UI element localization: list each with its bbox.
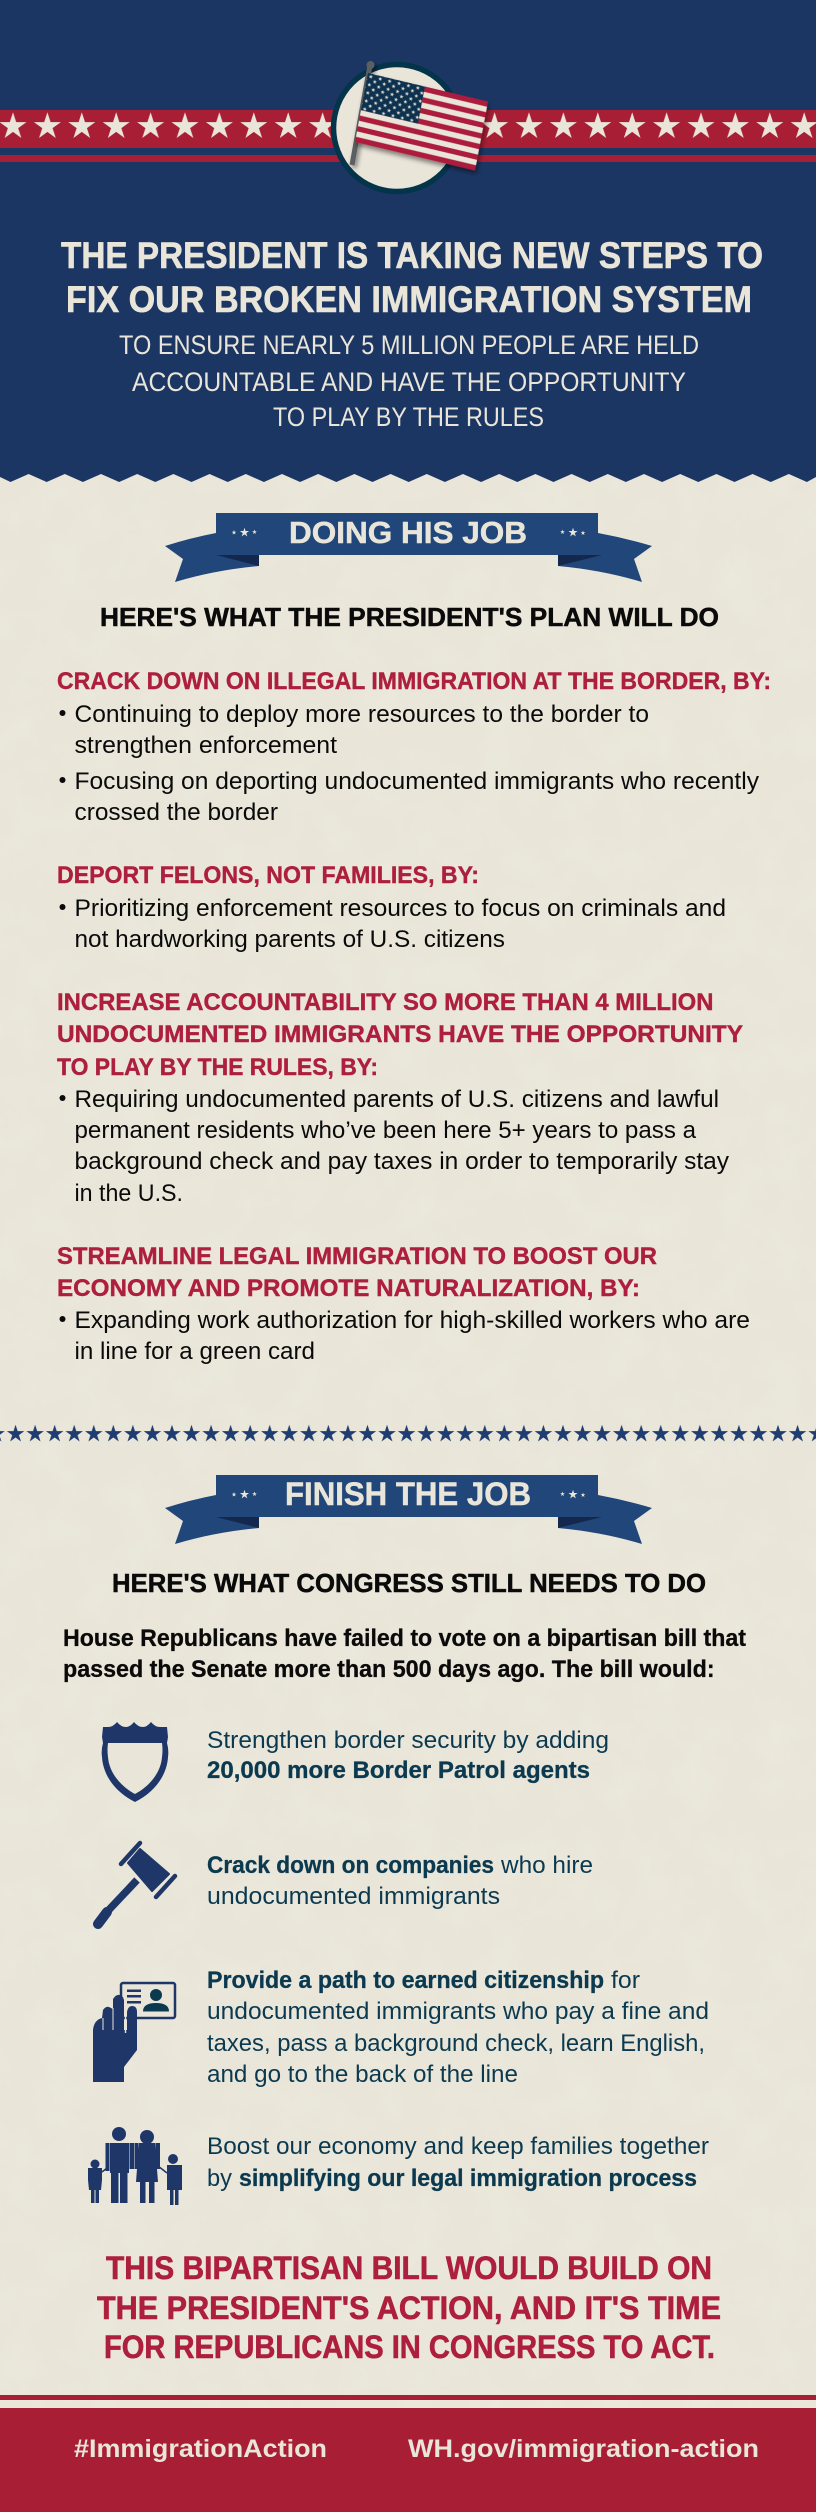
item: earned citizenship: undocumented immigrants who pay a fine and (207, 1998, 709, 2025)
header background with zigzag edge (0, 0, 816, 482)
item: border security: Strengthen border security by adding (207, 1727, 609, 1754)
item: earned citizenship: Provide a path to earned citizenship (207, 1967, 604, 1994)
closing statement: THIS BIPARTISAN BILL WOULD BUILD ON (106, 2250, 712, 2286)
heading: congress: HERE'S WHAT CONGRESS STILL NEEDS TO DO (112, 1568, 706, 1598)
section: deport felons (57, 862, 726, 953)
section: border enforcement: strengthen enforcement (74, 732, 337, 759)
section: accountability: INCREASE ACCOUNTABILITY SO MORE THAN 4 MILLION (57, 989, 714, 1016)
section: border enforcement (57, 668, 771, 826)
hashtag: #ImmigrationAction (74, 2435, 327, 2463)
icon: gavel (98, 1843, 175, 1924)
item: earned citizenship (93, 1967, 709, 2088)
section: legal immigration (57, 1243, 750, 1365)
banner: finish the job (165, 1475, 652, 1544)
item: legal immigration process: by (207, 2165, 232, 2192)
panel: header (0, 0, 816, 482)
banner: doing his job (165, 513, 652, 582)
section: legal immigration: in line for a green card (74, 1338, 315, 1365)
item: companies: who hire (500, 1852, 593, 1879)
section: border enforcement: Focusing on deporting undocumented immigrants who recently (74, 768, 759, 795)
section: legal immigration: ECONOMY AND PROMOTE NATURALIZATION, BY: (57, 1275, 640, 1302)
title: FIX OUR BROKEN IMMIGRATION SYSTEM (66, 279, 752, 320)
subtitle (119, 330, 699, 432)
closing statement: FOR REPUBLICANS IN CONGRESS TO ACT. (104, 2329, 715, 2365)
section: accountability (57, 989, 743, 1207)
section: accountability: background check and pay taxes in order to temporarily stay (74, 1148, 729, 1175)
icon: police shield (102, 1722, 168, 1802)
closing statement: THE PRESIDENT'S ACTION, AND IT'S TIME (97, 2290, 721, 2326)
section: accountability: TO PLAY BY THE RULES, BY: (57, 1054, 378, 1081)
icon: flag medallion (334, 61, 488, 192)
section: border enforcement: CRACK DOWN ON ILLEGAL IMMIGRATION AT THE BORDER, BY: (57, 668, 771, 695)
icon: family (88, 2127, 182, 2205)
item: legal immigration process: Boost our economy and keep families together (207, 2133, 709, 2160)
section: border enforcement: crossed the border (74, 799, 278, 826)
section: legal immigration: STREAMLINE LEGAL IMMIGRATION TO BOOST OUR (57, 1243, 657, 1270)
banner: doing his job: DOING HIS JOB (289, 515, 527, 550)
item: earned citizenship: taxes, pass a background check, learn English, (207, 2030, 705, 2057)
subtitle: TO ENSURE NEARLY 5 MILLION PEOPLE ARE HELD (119, 330, 699, 360)
item: legal immigration process (88, 2127, 709, 2205)
intro text: senate bill (63, 1625, 746, 1683)
item: earned citizenship: and go to the back of the line (207, 2061, 518, 2088)
item: companies (98, 1843, 593, 1924)
star band (0, 110, 816, 162)
section: deport felons: Prioritizing enforcement resources to focus on criminals and (74, 895, 726, 922)
section: accountability: UNDOCUMENTED IMMIGRANTS HAVE THE OPPORTUNITY (57, 1021, 743, 1048)
item: legal immigration process: simplifying our legal immigration process (239, 2165, 697, 2192)
section: border enforcement: Continuing to deploy more resources to the border to (74, 701, 649, 728)
intro text: senate bill: passed the Senate more than 500 days ago. The bill would: (63, 1656, 715, 1683)
icon: hand holding ID card (93, 1983, 175, 2082)
divider: row of stars (0, 1424, 816, 1444)
section: deport felons: DEPORT FELONS, NOT FAMILIES, BY: (57, 862, 479, 889)
item: earned citizenship: for (611, 1967, 640, 1994)
subtitle: TO PLAY BY THE RULES (273, 402, 544, 432)
heading: president's plan: HERE'S WHAT THE PRESIDENT'S PLAN WILL DO (100, 602, 719, 632)
footer (0, 2395, 816, 2512)
section: deport felons: not hardworking parents of U.S. citizens (74, 926, 505, 953)
section: accountability: permanent residents who’ve been here 5+ years to pass a (74, 1117, 697, 1144)
intro text: senate bill: House Republicans have failed to vote on a bipartisan bill that (63, 1625, 746, 1652)
section: accountability: in the U.S. (74, 1180, 183, 1207)
item: border security: 20,000 more Border Patrol agents (207, 1757, 590, 1784)
section: accountability: Requiring undocumented parents of U.S. citizens and lawful (74, 1086, 719, 1113)
banner: finish the job: FINISH THE JOB (285, 1476, 531, 1512)
subtitle: ACCOUNTABLE AND HAVE THE OPPORTUNITY (132, 367, 686, 397)
item: border security (102, 1722, 609, 1802)
title (61, 235, 763, 320)
item: companies: Crack down on companies (207, 1852, 494, 1879)
item: companies: undocumented immigrants (207, 1883, 500, 1910)
section: legal immigration: Expanding work authorization for high-skilled workers who are (74, 1307, 750, 1334)
closing statement (97, 2250, 721, 2365)
website: WH.gov/immigration-action (408, 2435, 759, 2463)
